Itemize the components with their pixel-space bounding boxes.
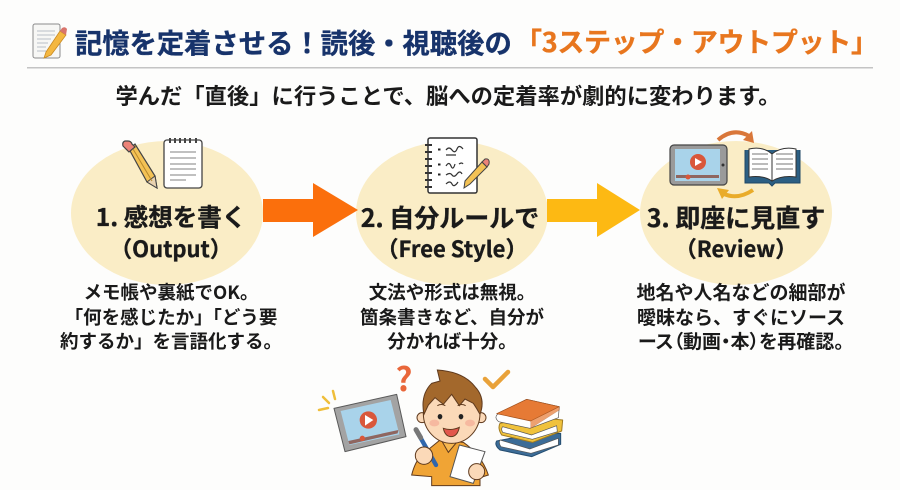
text block: step 1: 約するか」を言語化する。 xyxy=(60,328,282,354)
heading: step 1: 1. 感想を書く xyxy=(96,199,246,234)
text block: step 3: 地名や人名などの細部が xyxy=(636,278,846,305)
heading: step 3: 3. 即座に見直す xyxy=(647,199,825,235)
title highlight: 「3ステップ・アウトプット」 xyxy=(515,21,878,60)
text block: step 3: ース（動画・本）を再確認。 xyxy=(638,327,844,354)
text block: step 1: 「何を感じたか」「どう要 xyxy=(65,304,277,330)
icon: tablet step 3 xyxy=(670,145,727,185)
title: 記憶を定着させる！読後・視聴後の xyxy=(75,21,512,61)
text block: step 2: 文法や形式は無視。 xyxy=(369,279,535,305)
icon: question mark: ? xyxy=(396,353,412,401)
icon: notepad step 1 xyxy=(164,138,202,188)
icon: sparkle lines xyxy=(319,391,335,410)
icon: bottom tablet xyxy=(334,394,406,452)
icon: check mark xyxy=(485,372,508,387)
icon: orange cycle arrow xyxy=(718,131,754,143)
label: step 1 english: （Output） xyxy=(110,232,232,264)
label: step 2 english: （Free Style） xyxy=(377,232,527,264)
text block: step 2 xyxy=(360,279,544,354)
text block: step 1: メモ帳や裏紙でOK。 xyxy=(84,279,258,305)
subtitle: 学んだ「直後」に行うことで、脳への定着率が劇的に変わります。 xyxy=(115,79,781,111)
text block: step 3 xyxy=(636,278,846,354)
illustration: student xyxy=(412,370,488,486)
text block: step 3: 曖昧なら、すぐにソース xyxy=(637,302,845,330)
icon: stack of books xyxy=(496,399,563,457)
text block: step 2: 箇条書きなど、自分が xyxy=(360,304,544,330)
icon: open book step 3 xyxy=(745,148,800,186)
panel: step 3 ellipse xyxy=(640,141,832,285)
text block: step 1 xyxy=(60,279,282,354)
arrow: step 1 to 2 xyxy=(263,183,358,237)
icon: spiral notebook with pencil step 2 xyxy=(425,138,489,193)
title rule xyxy=(27,67,873,68)
arrow: step 2 to 3 xyxy=(547,183,640,237)
icon: pencil step 1 xyxy=(123,141,157,188)
text block: step 2: 分かれば十分。 xyxy=(387,328,517,354)
icon: memo and pencil xyxy=(33,24,67,58)
label: step 3 english: （Review） xyxy=(675,232,797,264)
heading: step 2: 2. 自分ルールで xyxy=(361,199,539,235)
panel: step 2 ellipse xyxy=(356,141,548,285)
icon: yellow cycle arrow xyxy=(717,188,753,199)
panel: step 1 ellipse xyxy=(71,141,263,285)
